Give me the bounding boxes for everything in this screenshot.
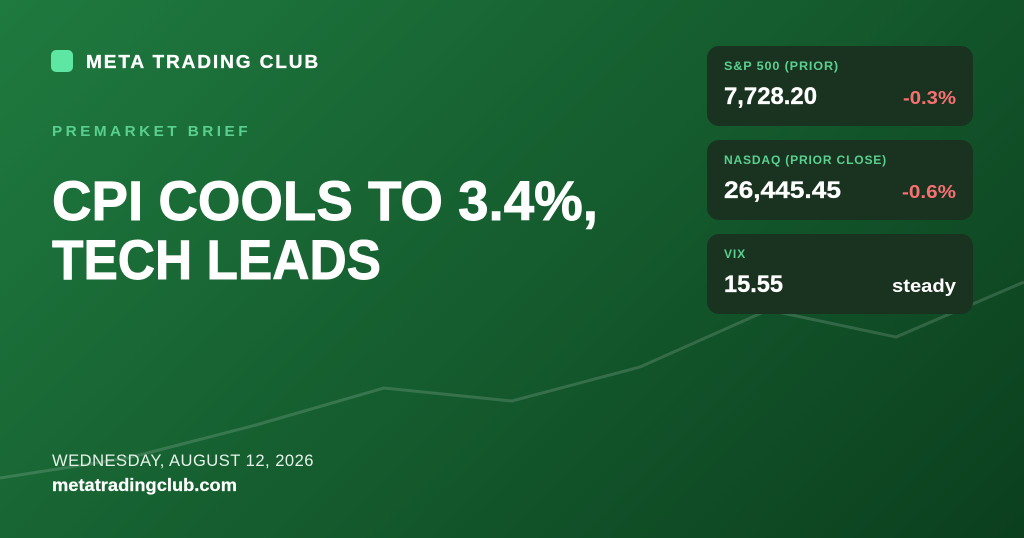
status: VIX: steady [892, 276, 956, 296]
icon: brand square [51, 50, 73, 72]
panel: S&P 500 [707, 46, 973, 126]
label: S&P 500: S&P 500 (PRIOR) [724, 59, 839, 73]
label: VIX: VIX [724, 247, 746, 261]
chart line [0, 282, 1024, 478]
label: NASDAQ: NASDAQ (PRIOR CLOSE) [724, 153, 887, 167]
eyebrow: PREMARKET BRIEF [52, 123, 251, 140]
change: NASDAQ: -0.6% [902, 182, 956, 202]
brand name: META TRADING CLUB [86, 51, 320, 72]
value: VIX: 15.55 [724, 271, 783, 298]
value: NASDAQ: 26,445.45 [724, 177, 841, 204]
title [52, 169, 598, 291]
title: TECH LEADS [52, 228, 381, 291]
panel: NASDAQ [707, 140, 973, 220]
website: metatradingclub.com [52, 475, 237, 495]
brand header [51, 50, 320, 72]
change: S&P 500: -0.3% [903, 88, 956, 108]
date: WEDNESDAY, AUGUST 12, 2026 [52, 451, 314, 470]
panel: VIX [707, 234, 973, 314]
title: CPI COOLS TO 3.4%, [52, 169, 598, 232]
value: S&P 500: 7,728.20 [724, 83, 817, 110]
